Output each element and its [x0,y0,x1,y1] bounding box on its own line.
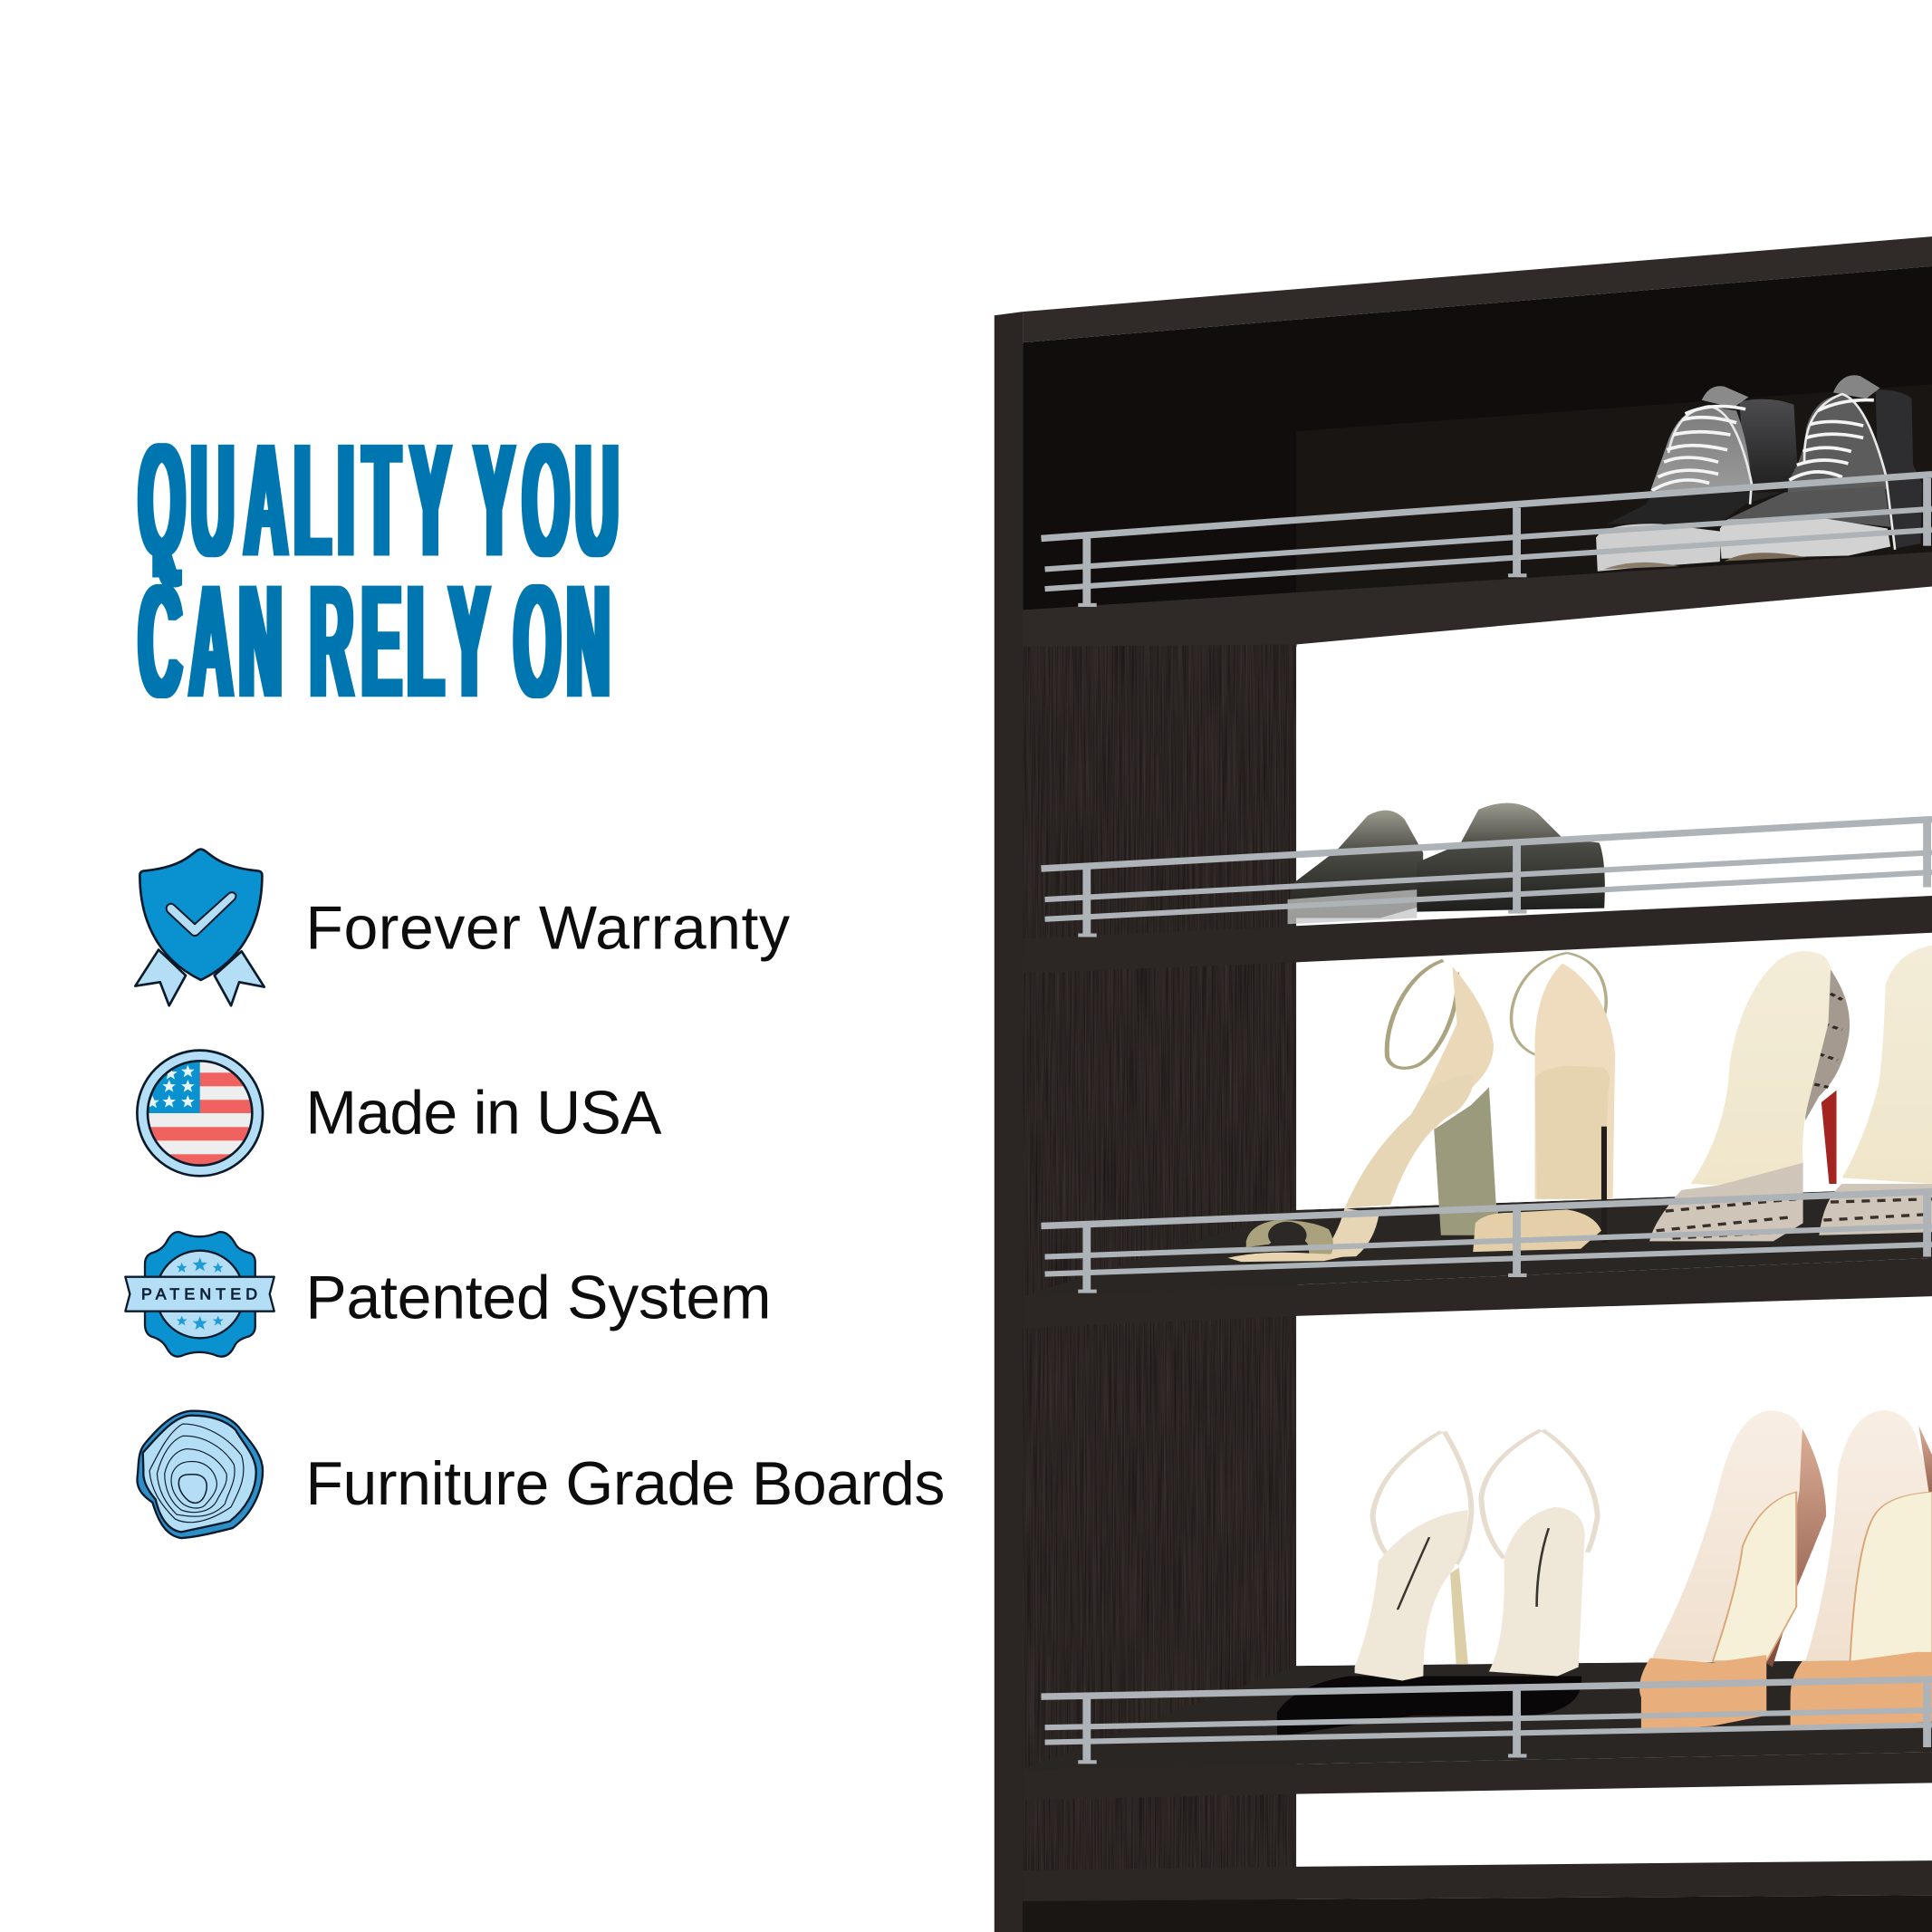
top board [1023,236,1932,342]
icon: wood rings [137,1411,263,1538]
white opening 4 [1296,1783,1932,1867]
side panel with wood grain [1023,640,1296,1932]
shelf board 5 [1023,1860,1932,1901]
top compartment interior [1023,266,1932,640]
shelf board 2 [1023,896,1932,974]
shelf board 4 [1023,1752,1932,1800]
title [139,410,619,732]
title: QUALITY YOU [139,410,619,591]
icon: patented badge [125,1232,274,1357]
heel pair: snake print pumps [1649,946,1932,1241]
metal rail 1 [1041,475,1932,605]
feature label: furniture grade boards: Furniture Grade Boards [305,1449,945,1518]
metal rail 2 [1041,820,1932,935]
feature label: made in usa: Made in USA [305,1079,662,1148]
shoe reflections [1277,1677,1581,1736]
heels on shelf 4 [1277,1410,1932,1736]
heel pair: ankle strap [1228,953,1615,1262]
slingback pair [1355,1430,1598,1681]
shelf board 1 [1023,552,1932,647]
icon: shield warranty [135,850,264,1005]
shelf surface 3 [1023,1187,1932,1296]
sneakers on shelf 1 [1596,375,1922,572]
title: CAN RELY ON [139,552,610,732]
metal rail 3 [1041,1191,1932,1292]
white opening 2 [1296,933,1932,1210]
white opening 3 [1296,1296,1932,1666]
sneakers on shelf 2 [1288,803,1605,924]
shoe cabinet [995,236,1932,1932]
feature label: patented system: Patented System [305,1264,772,1332]
lower compartment [1023,1895,1932,1932]
shelf surface 4 [1023,1659,1932,1769]
left sneaker [1596,386,1798,572]
heels on shelf 3 [1228,946,1932,1262]
outer stile [995,312,1023,1932]
feature label: forever warranty: Forever Warranty [305,893,790,962]
right sneaker [1720,375,1922,561]
pump pair [1639,1410,1932,1731]
metal rail 4 [1041,1679,1932,1762]
compartment back panel [1296,384,1932,616]
white opening 1 [1296,610,1932,927]
icon: usa flag [137,1051,263,1176]
icon: patented badge: PATENTED [141,1285,257,1303]
shelf board 3 [1023,1258,1932,1328]
